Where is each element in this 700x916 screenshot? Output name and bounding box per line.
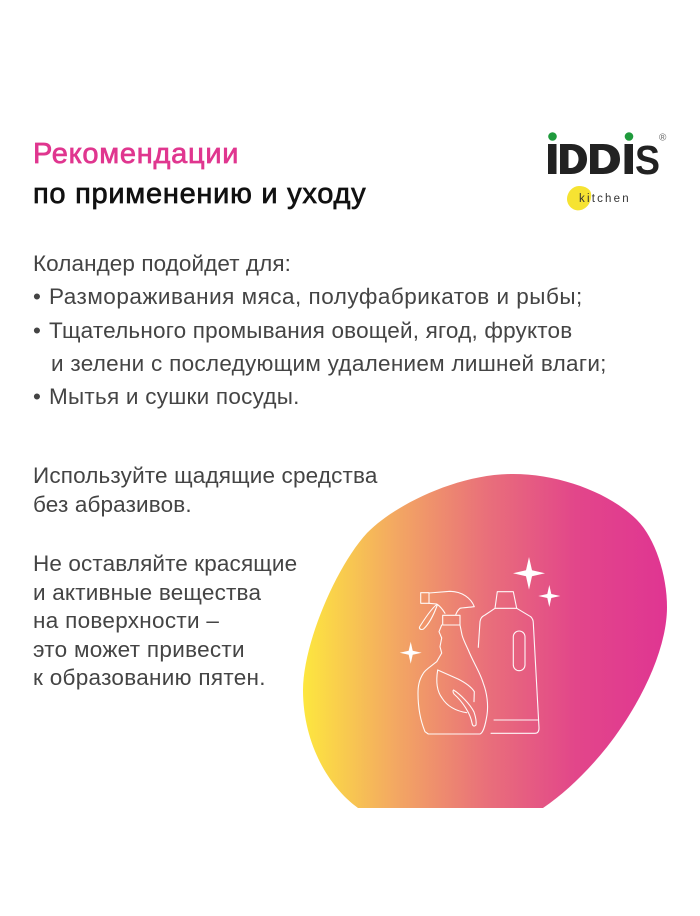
text block: uses list: • xyxy=(33,318,41,343)
text block: staining warning: и активные вещества xyxy=(33,580,261,604)
logo: IDDIS kitchen: ® xyxy=(659,132,667,144)
icon: sparkles xyxy=(400,557,560,664)
text block: uses list: Коландер подойдет для: xyxy=(33,251,291,276)
heading xyxy=(33,138,366,210)
text block: gentle products: Используйте щадящие средства xyxy=(33,463,378,488)
text block: staining warning: Не оставляйте красящие xyxy=(33,551,297,576)
heading: Рекомендации xyxy=(33,138,239,170)
logo: IDDIS kitchen: kitchen xyxy=(579,193,631,205)
blob xyxy=(303,474,667,808)
text block: uses list: Размораживания мяса, полуфабрикатов и рыбы; xyxy=(49,284,583,309)
text block: uses list: и зелени с последующим удалением лишней влаги; xyxy=(51,351,607,376)
logo: IDDIS kitchen: S xyxy=(635,137,660,183)
text block: staining warning xyxy=(33,551,297,690)
text block: uses list: • xyxy=(33,384,41,409)
text block: staining warning: это может привести xyxy=(33,636,245,662)
text block: gentle products xyxy=(33,463,378,517)
text block: gentle products: без абразивов. xyxy=(33,492,192,517)
heading: по применению и уходу xyxy=(33,178,366,210)
text block: uses list xyxy=(33,251,607,409)
icon: detergent bottle xyxy=(478,592,539,733)
text block: staining warning: на поверхности – xyxy=(33,608,219,633)
icon: spray bottle xyxy=(418,591,488,734)
text block: uses list: Тщательного промывания овощей, ягод, фруктов xyxy=(49,318,572,343)
text block: uses list: Мытья и сушки посуды. xyxy=(49,384,300,409)
text block: uses list: • xyxy=(33,284,41,309)
text block: staining warning: к образованию пятен. xyxy=(33,665,266,690)
